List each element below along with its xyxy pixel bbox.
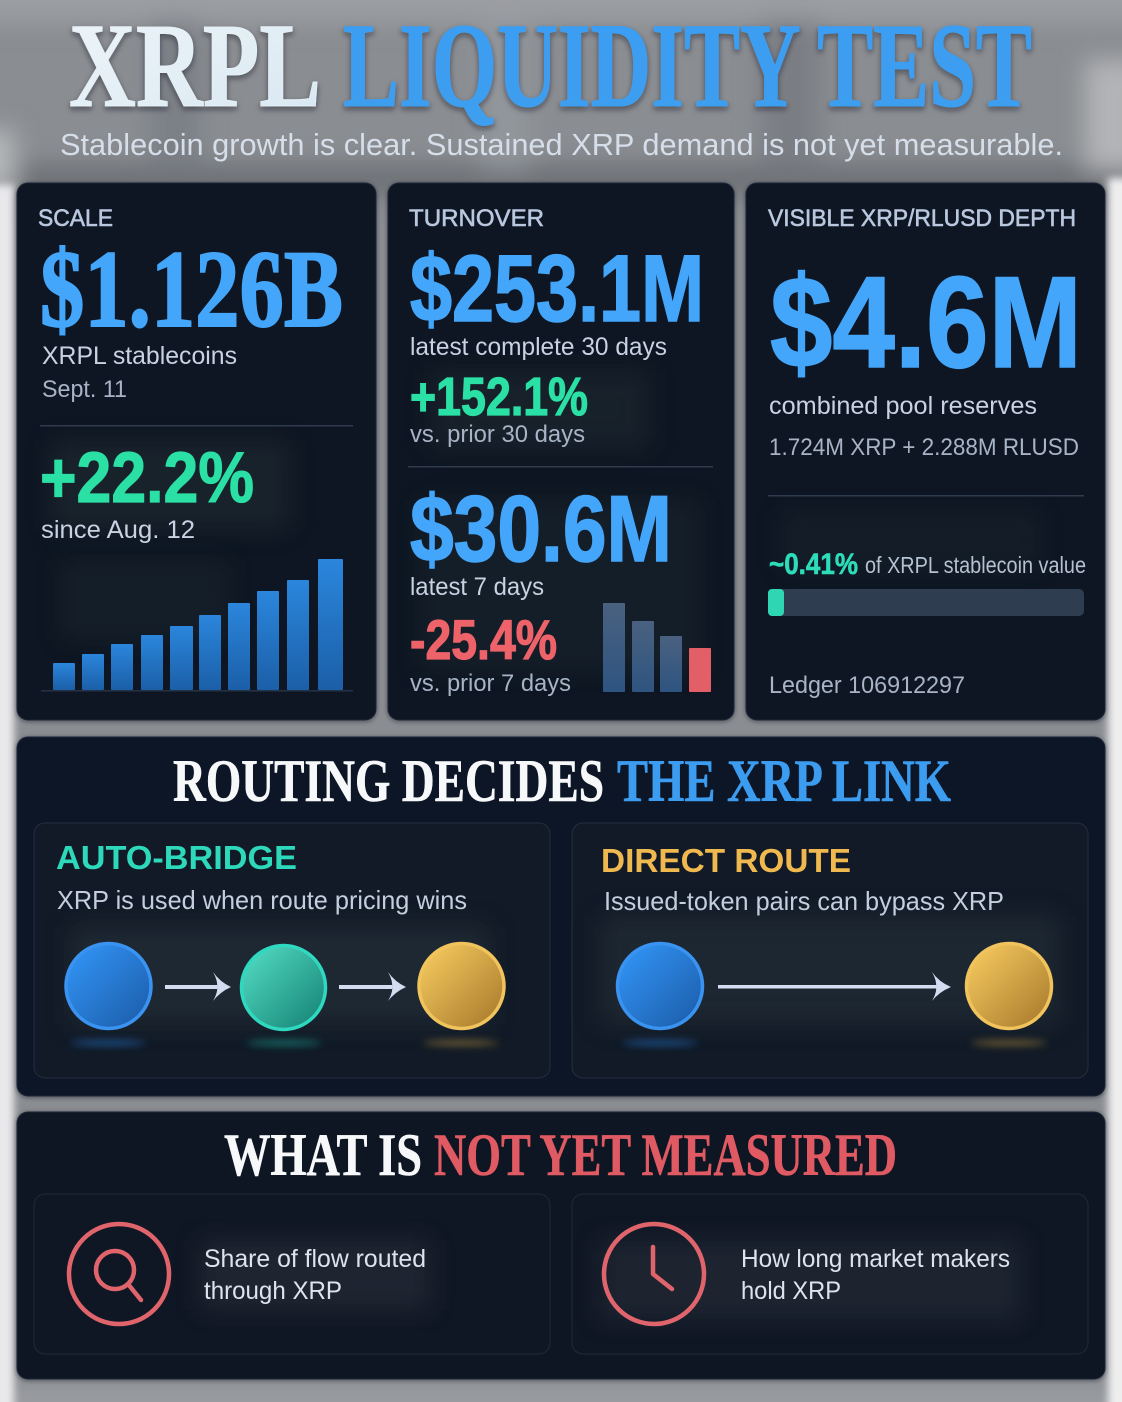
metric: share of stablecoin value: of XRPL stablecoin value (865, 552, 1086, 578)
arrow: direct (718, 972, 951, 1001)
label: turnover: TURNOVER (409, 205, 544, 232)
heading: routing decides the XRP link: THE XRP LINK (617, 748, 951, 814)
panel: routing (17, 737, 1105, 1096)
caption: reserves breakdown: 1.724M XRP + 2.288M RLUSD (769, 434, 1079, 461)
panel: scale (17, 183, 376, 720)
bar chart: weekly decline (603, 603, 711, 692)
node: blue coin (66, 944, 151, 1045)
text: flow share (204, 1245, 426, 1305)
text: holding time: hold XRP (741, 1277, 841, 1305)
caption: combined pool reserves: combined pool reserves (769, 392, 1037, 420)
sub-panel: auto-bridge (34, 823, 550, 1078)
sub-panel: flow share (34, 1194, 550, 1354)
description: auto-bridge: XRP is used when route pricing wins (57, 885, 467, 915)
node: blue coin (618, 944, 702, 1045)
title (69, 0, 1032, 133)
sub-panel: holding time (572, 1194, 1088, 1354)
subtitle: Stablecoin growth is clear. Sustained XRP demand is not yet measurable. (60, 127, 1063, 162)
label: depth: VISIBLE XRP/RLUSD DEPTH (768, 205, 1076, 232)
metric: 253.1M: $253.1M (410, 236, 704, 342)
text: flow share: Share of flow routed (204, 1245, 426, 1273)
metric: share of stablecoin value (769, 548, 1086, 581)
caption: since Aug. 12: since Aug. 12 (41, 516, 195, 544)
heading: auto-bridge: AUTO-BRIDGE (56, 839, 297, 876)
metric: 1.126B: $1.126B (40, 228, 343, 350)
arrow: blue to teal (165, 972, 231, 1001)
panel: visible depth (746, 183, 1105, 720)
title: XRPL (69, 0, 321, 133)
description: direct route: Issued-token pairs can bypass XRP (604, 886, 1004, 916)
icon: magnifier (69, 1224, 169, 1324)
arrow: teal to gold (339, 972, 406, 1001)
text: flow share: through XRP (204, 1277, 342, 1305)
sub-panel: direct route (572, 823, 1088, 1078)
heading: what is not yet measured: NOT YET MEASURED (434, 1122, 897, 1188)
caption: ledger: Ledger 106912297 (769, 672, 965, 699)
caption: latest complete 30 days: latest complete 30 days (410, 333, 667, 361)
heading: routing decides the XRP link: ROUTING DECIDES (173, 748, 604, 814)
caption: latest 7 days: latest 7 days (410, 573, 544, 601)
caption: vs prior 7 days: vs. prior 7 days (410, 670, 571, 697)
icon: clock (604, 1224, 704, 1324)
progress bar (768, 589, 1084, 616)
metric: 30.6M: $30.6M (410, 476, 672, 581)
metric: plus 152.1 percent: +152.1% (410, 367, 588, 427)
text: holding time: How long market makers (741, 1245, 1010, 1273)
metric: share of stablecoin value: ~0.41% (769, 548, 858, 581)
heading: direct route: DIRECT ROUTE (601, 842, 851, 879)
text: holding time (741, 1245, 1010, 1305)
node: gold coin (419, 944, 504, 1045)
caption: XRPL stablecoins: XRPL stablecoins (42, 342, 237, 370)
panel: not yet measured (17, 1112, 1105, 1379)
node: teal coin (242, 946, 326, 1045)
caption: vs prior 30 days: vs. prior 30 days (410, 421, 585, 448)
metric: plus 22.2 percent: +22.2% (40, 439, 254, 518)
bar chart: stablecoin growth (41, 559, 353, 692)
caption: date: Sept. 11 (42, 376, 127, 403)
heading: what is not yet measured: WHAT IS (224, 1122, 422, 1188)
metric: 4.6M: $4.6M (770, 249, 1082, 395)
node: gold coin (966, 944, 1052, 1045)
metric: minus 25.4 percent: -25.4% (410, 608, 557, 671)
label: scale: SCALE (38, 205, 113, 232)
panel: turnover (388, 183, 734, 720)
heading: what is not yet measured (224, 1122, 897, 1188)
